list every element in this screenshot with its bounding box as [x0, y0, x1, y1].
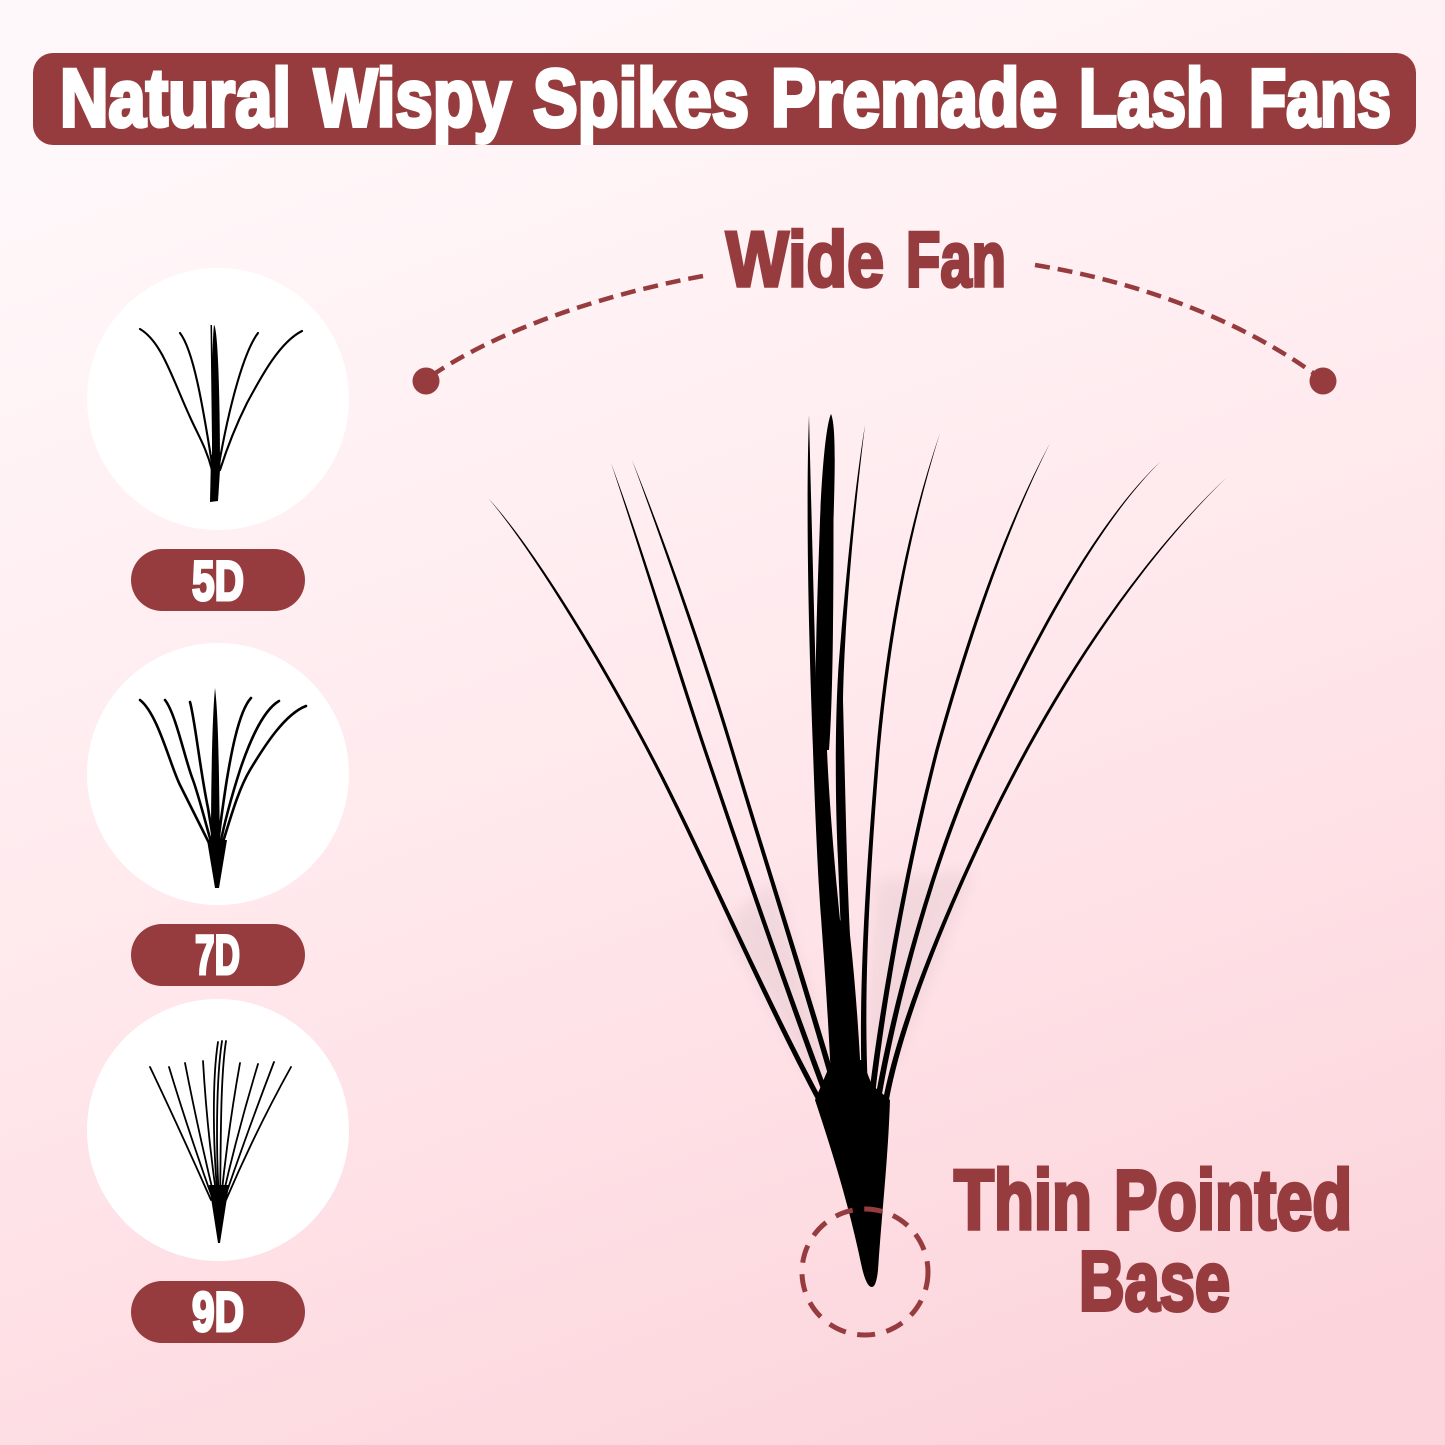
heading: Wide Fan [726, 215, 1006, 303]
title banner: Spikes [533, 53, 749, 144]
right dashed arc [1035, 265, 1316, 375]
callout: wide fan arc [412, 215, 1336, 394]
right arc endpoint [1310, 368, 1336, 394]
heading: Wide Fan: Wide [726, 215, 884, 303]
heading: Wide Fan: Fan [906, 215, 1006, 303]
label pill: 9D [131, 1280, 305, 1343]
label pill: 7D: 7D [195, 923, 240, 986]
heading: Thin Pointed Base: Pointed [1114, 1153, 1352, 1247]
heading: Thin Pointed Base [954, 1153, 1352, 1328]
panel: 9D lash option [87, 999, 349, 1343]
title banner: Natural [60, 53, 291, 144]
main lash fan illustration [488, 414, 1227, 1287]
label pill: 7D [131, 923, 305, 986]
callout: thin pointed base [802, 1153, 1352, 1335]
panel: 7D lash option [87, 643, 349, 986]
title banner: Lash [1079, 53, 1224, 144]
label pill: 5D: 5D [192, 549, 244, 612]
label pill: 5D [131, 549, 305, 612]
left dashed arc [434, 276, 703, 374]
panel: 5D lash option [87, 268, 349, 612]
dashed circle highlight [802, 1209, 928, 1335]
title banner: Fans [1249, 53, 1391, 144]
title banner: Wispy [314, 53, 511, 144]
icon: 9D lash fan [87, 999, 349, 1261]
heading: Thin Pointed Base: Base [1079, 1234, 1230, 1328]
title banner: Premade [771, 53, 1057, 144]
label pill: 9D: 9D [192, 1280, 244, 1343]
left arc endpoint [412, 368, 440, 394]
icon: 7D lash fan [87, 643, 349, 905]
heading: Thin Pointed Base: Thin [954, 1153, 1092, 1247]
title banner [33, 53, 1416, 145]
icon: 5D lash fan [87, 268, 349, 530]
